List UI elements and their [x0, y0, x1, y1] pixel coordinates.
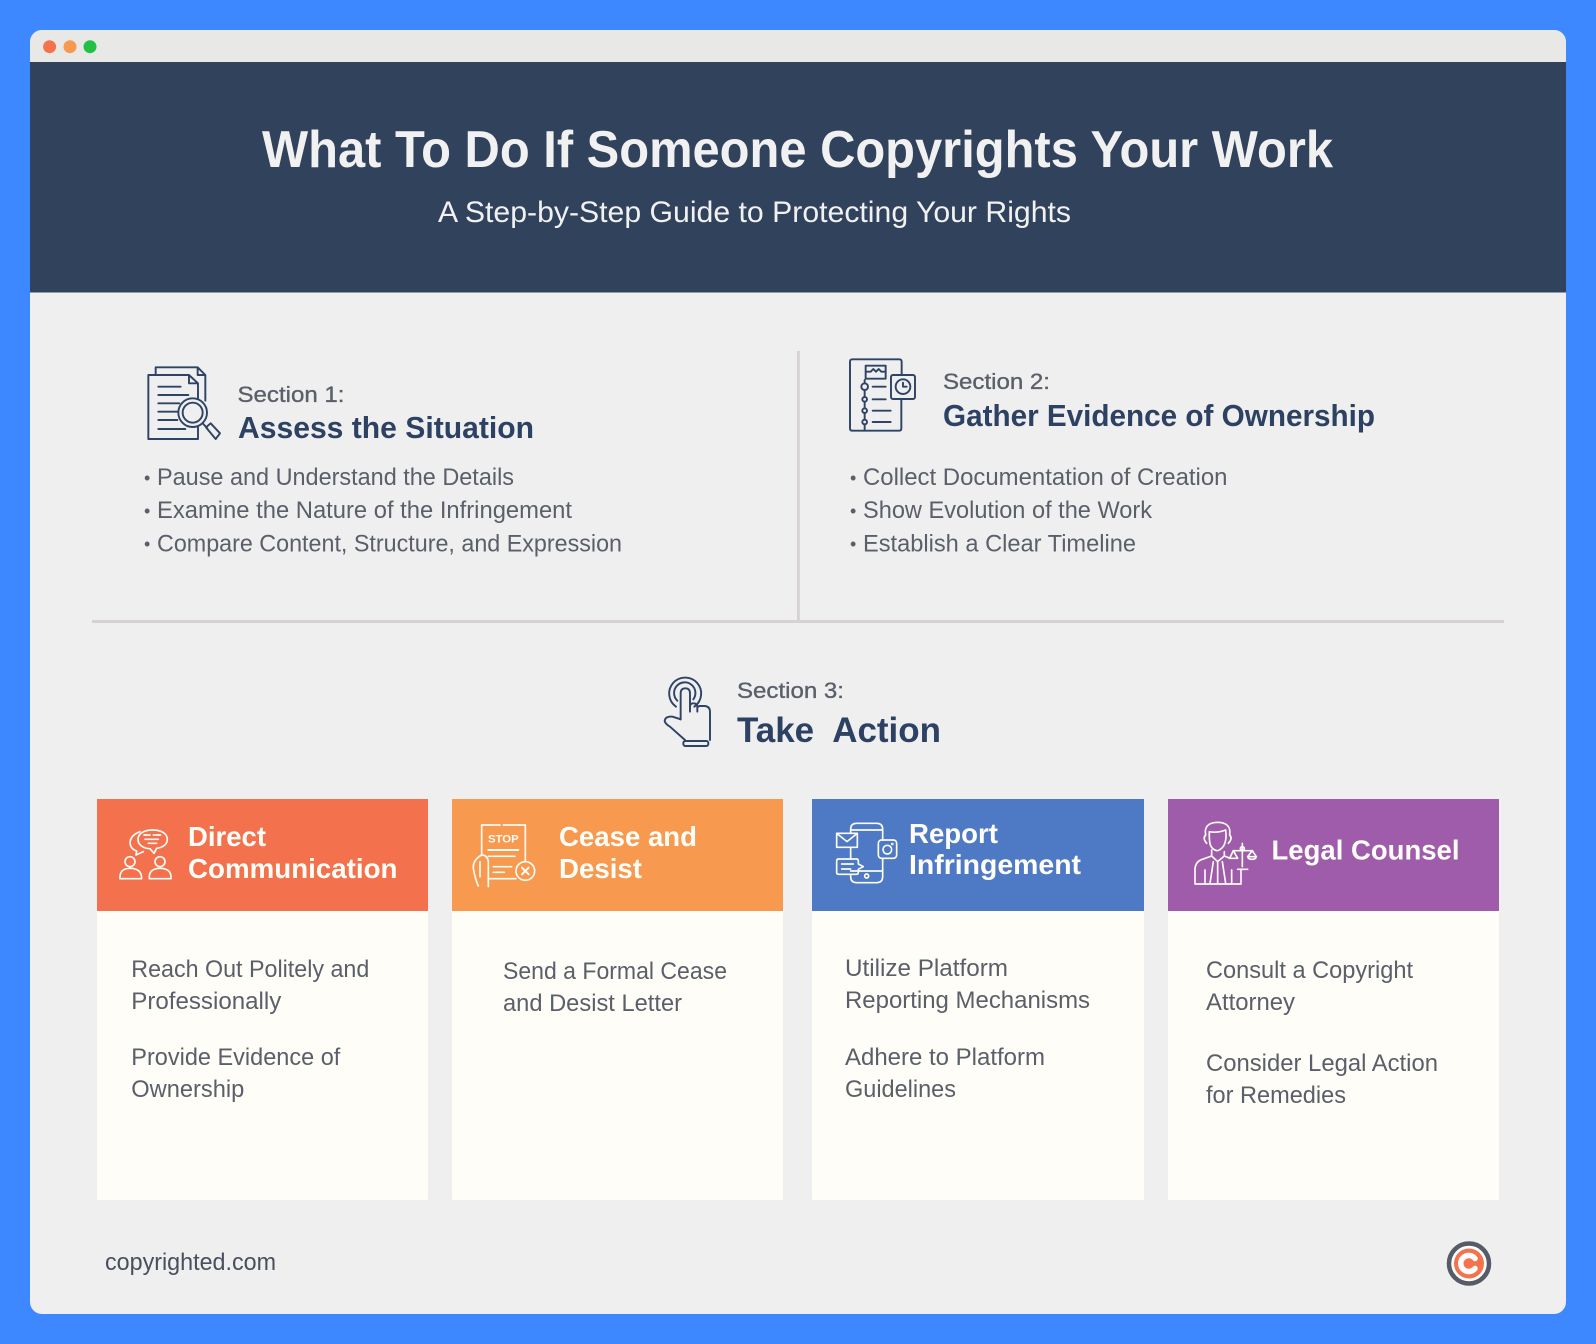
panel: section 1 [144, 367, 622, 558]
section 1 bullet list: Examine the Nature of the Infringement [157, 497, 572, 524]
card text: Attorney [1206, 989, 1295, 1016]
icon: stop letter in hand [473, 825, 535, 887]
panel: section 2 [850, 359, 1375, 558]
card: report infringement [812, 799, 1144, 1200]
window control dots [43, 40, 96, 53]
card header [452, 799, 783, 911]
section 2 bullet list: • [850, 468, 856, 488]
card text: for Remedies [1206, 1082, 1346, 1109]
section 2 heading: Gather Evidence of Ownership [943, 398, 1375, 433]
card text: Reach Out Politely and [131, 956, 369, 983]
section 1 bullet list: • [144, 468, 150, 488]
card heading: Legal Counsel [1272, 834, 1460, 866]
card heading: Infringement [909, 849, 1081, 880]
card text: Utilize Platform [845, 955, 1008, 982]
card text: Send a Formal Cease [503, 958, 727, 985]
footer url: copyrighted.com [105, 1249, 276, 1276]
section 2 label: Section 2: [943, 369, 1050, 394]
section 3 heading: Take Action [737, 711, 941, 750]
card text: Reporting Mechanisms [845, 987, 1090, 1014]
card text: Adhere to Platform [845, 1044, 1045, 1071]
icon: phone with messages [837, 823, 897, 883]
icon: people talking [120, 830, 171, 879]
card heading: Direct [188, 821, 266, 852]
card text [503, 958, 727, 1017]
section 2 bullet list: Establish a Clear Timeline [863, 530, 1136, 558]
card text [131, 956, 369, 1103]
header banner [30, 62, 1566, 292]
card header [812, 799, 1144, 911]
subtitle: A Step-by-Step Guide to Protecting Your Rights [438, 196, 1071, 229]
card text: Consult a Copyright [1206, 957, 1413, 984]
card: legal counsel [1168, 799, 1499, 1200]
card heading: Report [909, 818, 998, 849]
card text: Ownership [131, 1076, 244, 1103]
logo: copyright mark [1449, 1244, 1489, 1284]
section 3 label: Section 3: [737, 678, 844, 703]
section 1 bullet list: • [144, 534, 150, 554]
card header [97, 799, 428, 911]
section 1 bullet list [144, 464, 622, 558]
card heading [559, 821, 697, 884]
section 2 bullet list: • [850, 501, 856, 521]
section 2 bullet list: • [850, 534, 856, 554]
card heading: Cease and [559, 821, 697, 852]
section 1 bullet list: Compare Content, Structure, and Expression [157, 530, 622, 558]
section 1 bullet list: Pause and Understand the Details [157, 464, 514, 491]
section 2 bullet list: Show Evolution of the Work [863, 497, 1153, 524]
card heading [909, 818, 1081, 880]
section 2 bullet list [850, 464, 1228, 558]
icon: lawyer with scales [1195, 822, 1256, 884]
section 3 heading block [665, 678, 941, 750]
card text: and Desist Letter [503, 990, 682, 1017]
section 2 bullet list: Collect Documentation of Creation [863, 464, 1228, 491]
card text: Provide Evidence of [131, 1044, 341, 1071]
card text: Consider Legal Action [1206, 1050, 1438, 1077]
window title bar [30, 30, 1566, 62]
section 1 bullet list: • [144, 501, 150, 521]
card heading: Communication [188, 853, 398, 884]
title: What To Do If Someone Copyrights Your Work [262, 121, 1333, 179]
card header [1168, 799, 1499, 911]
card: cease and desist [452, 799, 783, 1200]
section 1 label: Section 1: [238, 382, 344, 407]
card heading [188, 821, 398, 884]
card: direct communication [97, 799, 428, 1200]
section 1 heading: Assess the Situation [238, 410, 534, 445]
card text: Professionally [131, 988, 281, 1015]
card text [1206, 957, 1438, 1109]
icon: stop letter in hand: STOP [488, 833, 519, 845]
card text: Guidelines [845, 1076, 956, 1103]
icon: document with magnifier [148, 367, 220, 439]
card heading: Desist [559, 853, 642, 884]
icon: pointing hand tap [665, 678, 710, 746]
icon: evidence checklist with clock [850, 359, 915, 431]
card text [845, 955, 1090, 1103]
